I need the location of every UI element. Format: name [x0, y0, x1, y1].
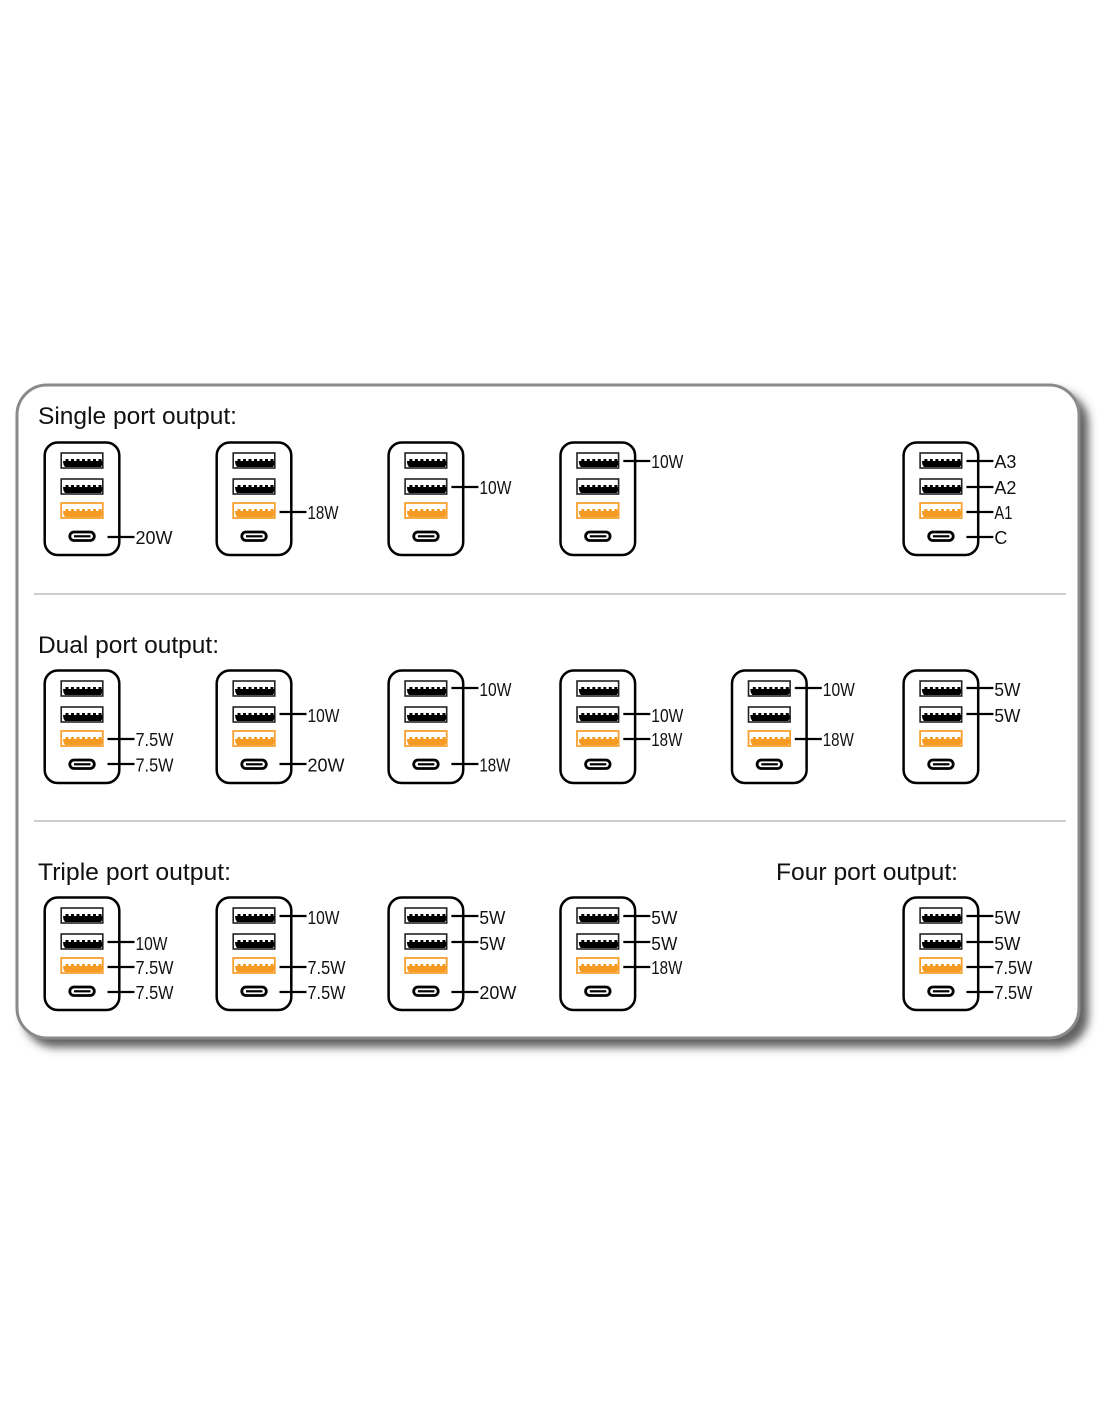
charger: dual, A3 10W and C 18W: 18W	[479, 756, 510, 776]
heading: four port output: Four port output:	[776, 859, 958, 886]
charger: port name key: A1	[994, 503, 1012, 523]
charger: four port, 5W 5W 7.5W 7.5W: 7.5W	[994, 983, 1032, 1003]
heading: triple port output: Triple port output:	[38, 859, 231, 886]
charger: dual, A1 7.5W and C 7.5W: 7.5W	[136, 730, 174, 750]
charger: dual, A1 7.5W and C 7.5W: 7.5W	[136, 756, 174, 776]
charger: port name key	[904, 442, 1016, 555]
charger: dual, A3 5W and A2 5W	[904, 670, 1020, 783]
charger: triple, 5W 5W 20W: 20W	[479, 983, 516, 1003]
charger: triple, 5W 5W 20W: 5W	[479, 908, 505, 928]
charger: dual, A1 7.5W and C 7.5W	[45, 670, 174, 783]
charger: port name key: C	[994, 528, 1007, 548]
charger: triple, 5W 5W 18W	[560, 898, 682, 1010]
charger: triple, 5W 5W 20W: 5W	[479, 934, 505, 954]
charger: dual, A3 10W and C 18W: 10W	[479, 680, 511, 700]
charger: four port, 5W 5W 7.5W 7.5W: 5W	[994, 934, 1020, 954]
charger: single, A1 18W	[217, 442, 339, 555]
charger: four port, 5W 5W 7.5W 7.5W: 5W	[994, 908, 1020, 928]
charger: single, USB-C 20W: 20W	[136, 528, 173, 548]
charger: triple, 5W 5W 18W: 5W	[651, 908, 677, 928]
charger: triple, 10W 7.5W 7.5W: 7.5W	[136, 958, 174, 978]
charger: dual, A3 5W and A2 5W: 5W	[994, 706, 1020, 726]
charger: triple, 10W 7.5W 7.5W top: 10W	[308, 908, 340, 928]
charger: dual, A3 5W and A2 5W: 5W	[994, 680, 1020, 700]
charger: triple, 10W 7.5W 7.5W: 7.5W	[136, 983, 174, 1003]
charger: dual, A2 10W and C 20W: 20W	[308, 756, 345, 776]
charger: port name key: A2	[994, 478, 1016, 498]
heading: dual port output: Dual port output:	[38, 632, 219, 659]
charger: single, A2 10W	[389, 442, 511, 555]
charger: single, A1 18W: 18W	[308, 503, 339, 523]
charger: triple, 10W 7.5W 7.5W top	[217, 898, 346, 1010]
heading: single port output: Single port output:	[38, 403, 237, 430]
charger: single, USB-C 20W	[45, 442, 173, 555]
charger: triple, 5W 5W 18W: 18W	[651, 958, 682, 978]
charger: triple, 10W 7.5W 7.5W top: 7.5W	[308, 958, 346, 978]
charger: dual, A3 10W and A1 18W: 18W	[823, 730, 854, 750]
charger: dual, A2 10W and A1 18W	[560, 670, 683, 783]
charger: dual, A3 10W and C 18W	[389, 670, 511, 783]
charger: triple, 5W 5W 18W: 5W	[651, 934, 677, 954]
panel: port output card	[17, 385, 1079, 1038]
charger: port name key: A3	[994, 452, 1016, 472]
charger: dual, A3 10W and A1 18W	[732, 670, 855, 783]
charger: single, A3 10W	[560, 442, 683, 555]
charger: four port, 5W 5W 7.5W 7.5W: 7.5W	[994, 958, 1032, 978]
charger: dual, A2 10W and A1 18W: 10W	[651, 706, 683, 726]
charger: triple, 10W 7.5W 7.5W top: 7.5W	[308, 983, 346, 1003]
charger: single, A2 10W: 10W	[479, 478, 511, 498]
charger: dual, A2 10W and A1 18W: 18W	[651, 730, 682, 750]
charger: single, A3 10W: 10W	[651, 452, 683, 472]
charger: dual, A2 10W and C 20W	[217, 670, 345, 783]
charger: four port, 5W 5W 7.5W 7.5W	[904, 898, 1032, 1010]
charger: triple, 10W 7.5W 7.5W	[45, 898, 174, 1010]
charger: dual, A2 10W and C 20W: 10W	[308, 706, 340, 726]
charger: dual, A3 10W and A1 18W: 10W	[823, 680, 855, 700]
charger: triple, 5W 5W 20W	[389, 898, 516, 1010]
charger: triple, 10W 7.5W 7.5W: 10W	[136, 934, 168, 954]
